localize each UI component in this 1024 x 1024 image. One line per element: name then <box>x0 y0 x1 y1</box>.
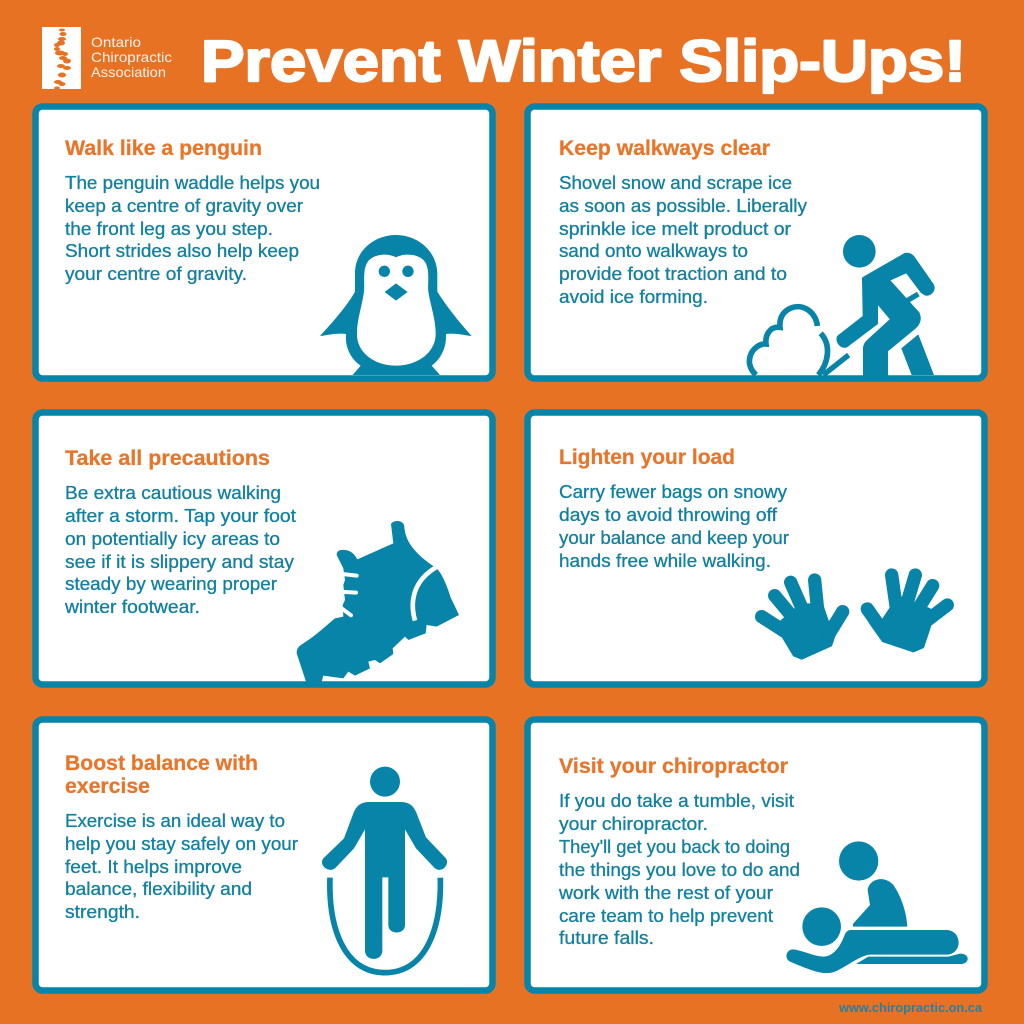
body text: your chiropractor. <box>559 814 708 834</box>
panel frame <box>36 720 492 990</box>
heading: exercise <box>65 774 150 798</box>
body text <box>65 811 298 922</box>
left hand <box>762 580 843 658</box>
body text: the front leg as you step. <box>65 219 273 239</box>
logo wordmark: Chiropractic <box>91 49 172 65</box>
body text: days to avoid throwing off <box>559 505 778 525</box>
body text: winter footwear. <box>64 597 200 617</box>
body text: the things you love to do and <box>559 860 800 880</box>
body text: avoid ice forming. <box>559 287 708 307</box>
heading: Lighten your load <box>559 445 735 469</box>
body text: balance, flexibility and <box>65 879 252 899</box>
body text: Carry fewer bags on snowy <box>559 482 787 502</box>
body text: your centre of gravity. <box>65 264 247 284</box>
heading: Take all precautions <box>65 446 270 470</box>
heading: Walk like a penguin <box>65 136 262 160</box>
icon: two open hands <box>762 575 947 658</box>
panel: boost balance with exercise <box>36 720 492 990</box>
body text: They'll get you back to doing <box>559 837 790 857</box>
icon: penguin <box>320 235 472 375</box>
logo mark: spine <box>42 27 81 90</box>
logo wordmark: Association <box>91 64 166 80</box>
body text: If you do take a tumble, visit <box>559 791 794 811</box>
heading <box>65 751 258 798</box>
body text: keep a centre of gravity over <box>65 196 303 216</box>
body text: work with the rest of your <box>558 883 773 903</box>
body text: care team to help prevent <box>559 906 773 926</box>
right hand <box>867 575 947 651</box>
body text: steady by wearing proper <box>65 574 277 594</box>
body text: strength. <box>65 902 140 922</box>
panel frame <box>528 720 984 990</box>
panel: take all precautions <box>36 412 492 684</box>
body text: see if it is slippery and stay <box>65 552 294 572</box>
body text: Shovel snow and scrape ice <box>559 173 792 193</box>
body text: future falls. <box>559 928 654 948</box>
body text: sprinkle ice melt product or <box>559 219 791 239</box>
body text: Exercise is an ideal way to <box>65 811 285 831</box>
panel frame <box>36 106 492 378</box>
icon: winter boot <box>297 521 459 682</box>
panel: keep walkways clear <box>528 106 984 378</box>
body text: help you stay safely on your <box>65 834 298 854</box>
body text <box>559 173 807 307</box>
panel: visit your chiropractor <box>528 720 984 990</box>
icon: person shovelling snow <box>749 235 934 375</box>
icon: chiropractor treating patient <box>786 841 968 973</box>
panel: lighten your load <box>528 412 984 684</box>
body text <box>65 173 320 284</box>
panel frame <box>528 106 984 378</box>
body text: feet. It helps improve <box>65 857 242 877</box>
body text <box>559 482 789 571</box>
body text: hands free while walking. <box>559 551 771 571</box>
body text <box>64 483 296 617</box>
panel frame <box>528 412 984 684</box>
title: Prevent Winter Slip-Ups! <box>201 29 966 94</box>
heading: Visit your chiropractor <box>559 754 789 778</box>
heading: Keep walkways clear <box>559 136 771 160</box>
body text: The penguin waddle helps you <box>65 173 320 193</box>
body text <box>558 791 800 948</box>
body text: as soon as possible. Liberally <box>559 196 807 216</box>
body text: provide foot traction and to <box>559 264 787 284</box>
logo wordmark <box>91 34 172 80</box>
body text: sand onto walkways to <box>559 241 748 261</box>
body text: Be extra cautious walking <box>65 483 281 503</box>
body text: Short strides also help keep <box>65 241 299 261</box>
panel frame <box>36 412 492 684</box>
logo wordmark: Ontario <box>91 34 141 50</box>
logo: Ontario Chiropractic Association <box>42 27 172 90</box>
body text: on potentially icy areas to <box>65 529 280 549</box>
body text: after a storm. Tap your foot <box>65 506 296 526</box>
website url: www.chiropractic.on.ca <box>838 1001 983 1015</box>
icon: person skipping rope <box>322 767 447 973</box>
panel: walk like a penguin <box>36 106 492 378</box>
heading: Boost balance with <box>65 751 258 775</box>
body text: your balance and keep your <box>559 528 789 548</box>
